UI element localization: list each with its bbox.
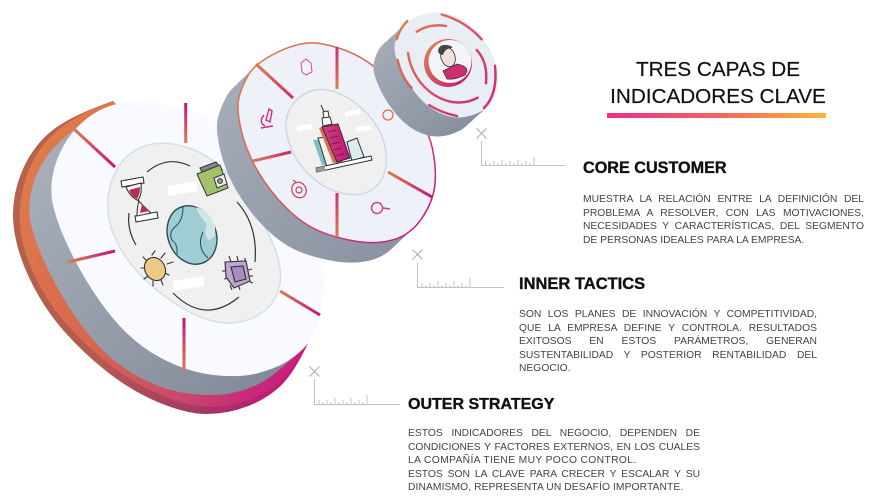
text: core customer: PROBLEMA A RESOLVER, CON LAS MOTIVACIONES,	[583, 208, 864, 219]
text: outer strategy: DINAMISMO, REPRESENTA UN DESAFÍO IMPORTANTE.	[408, 482, 683, 493]
icon: globe	[159, 198, 225, 272]
middle disc spokes	[253, 47, 432, 237]
ruler: inner tactics	[412, 250, 504, 288]
small disc arcs	[397, 14, 496, 116]
icon: microscope	[261, 109, 273, 128]
hub highlights	[297, 109, 371, 132]
text: core customer: MUESTRA LA RELACIÓN ENTRE LA DEFINICIÓN DEL	[583, 194, 864, 205]
outer disc rim highlight	[20, 101, 311, 407]
small disc face	[394, 12, 498, 118]
small disc side	[373, 17, 493, 137]
icon: money bag	[289, 180, 309, 200]
inner tactics disc	[217, 43, 435, 263]
text: outer strategy: LA COMPAÑÍA TIENE MUY POCO CONTROL.	[408, 455, 637, 466]
title: TRES CAPAS DE	[636, 58, 800, 81]
text: inner tactics: QUE LA EMPRESA DEFINE Y CONTROLA. RESULTADOS	[519, 323, 817, 334]
text: inner tactics: SUSTENTABILIDAD Y POSTERIOR RENTABILIDAD DEL	[519, 350, 817, 361]
heading: outer strategy: OUTER STRATEGY	[408, 396, 554, 413]
title: INDICADORES CLAVE	[610, 85, 826, 108]
icon: hourglass	[121, 177, 158, 222]
outer disc rim	[13, 101, 311, 414]
icon: shield	[301, 59, 312, 75]
icon: stopwatch	[383, 110, 393, 120]
text: outer strategy: ESTOS INDICADORES DEL NEGOCIO, DEPENDEN DE	[408, 428, 700, 439]
text: outer strategy: CONDICIONES Y FACTORES EXTERNOS, EN LOS CUALES	[408, 442, 700, 453]
text: inner tactics: NEGOCIO.	[519, 363, 570, 374]
title	[610, 58, 826, 108]
core customer disc	[373, 12, 498, 137]
middle disc face	[238, 43, 435, 243]
icon: wallet	[197, 162, 228, 196]
icon: chip	[222, 256, 253, 290]
text: core customer: NECESIDADES Y CARACTERÍSTICAS, DEL SEGMENTO	[583, 221, 864, 232]
title underline	[607, 113, 826, 118]
outer disc side	[29, 106, 318, 395]
outer disc hub	[108, 143, 281, 323]
hub highlights	[168, 181, 204, 291]
middle disc hub	[286, 90, 386, 195]
text: outer strategy: ESTOS SON LA CLAVE PARA CRECER Y ESCALAR Y SU	[408, 469, 700, 480]
heading: inner tactics: INNER TACTICS	[519, 275, 645, 293]
ruler: outer strategy	[310, 366, 400, 404]
text: outer strategy	[408, 428, 700, 493]
text: inner tactics: SON LOS PLANES DE INNOVACIÓN Y COMPETITIVIDAD,	[519, 309, 817, 320]
text: core customer	[583, 193, 864, 246]
outer disc spokes	[68, 103, 320, 370]
text: inner tactics	[519, 308, 817, 374]
icon: customer avatar	[424, 39, 472, 87]
outer disc face	[51, 101, 324, 376]
text: inner tactics: EXITOSOS EN ESTOS PARÁMETROS, GENERAN	[519, 336, 817, 347]
text: core customer: DE PERSONAS IDEALES PARA LA EMPRESA.	[583, 235, 804, 246]
middle disc side	[217, 48, 430, 263]
outer strategy disc	[13, 101, 324, 414]
heading: core customer: CORE CUSTOMER	[583, 159, 727, 177]
icon: building	[313, 105, 372, 172]
ruler: core customer	[476, 128, 565, 166]
icon: magnifier	[372, 202, 390, 214]
hub arcs	[129, 162, 255, 310]
icon: sun	[140, 251, 173, 286]
